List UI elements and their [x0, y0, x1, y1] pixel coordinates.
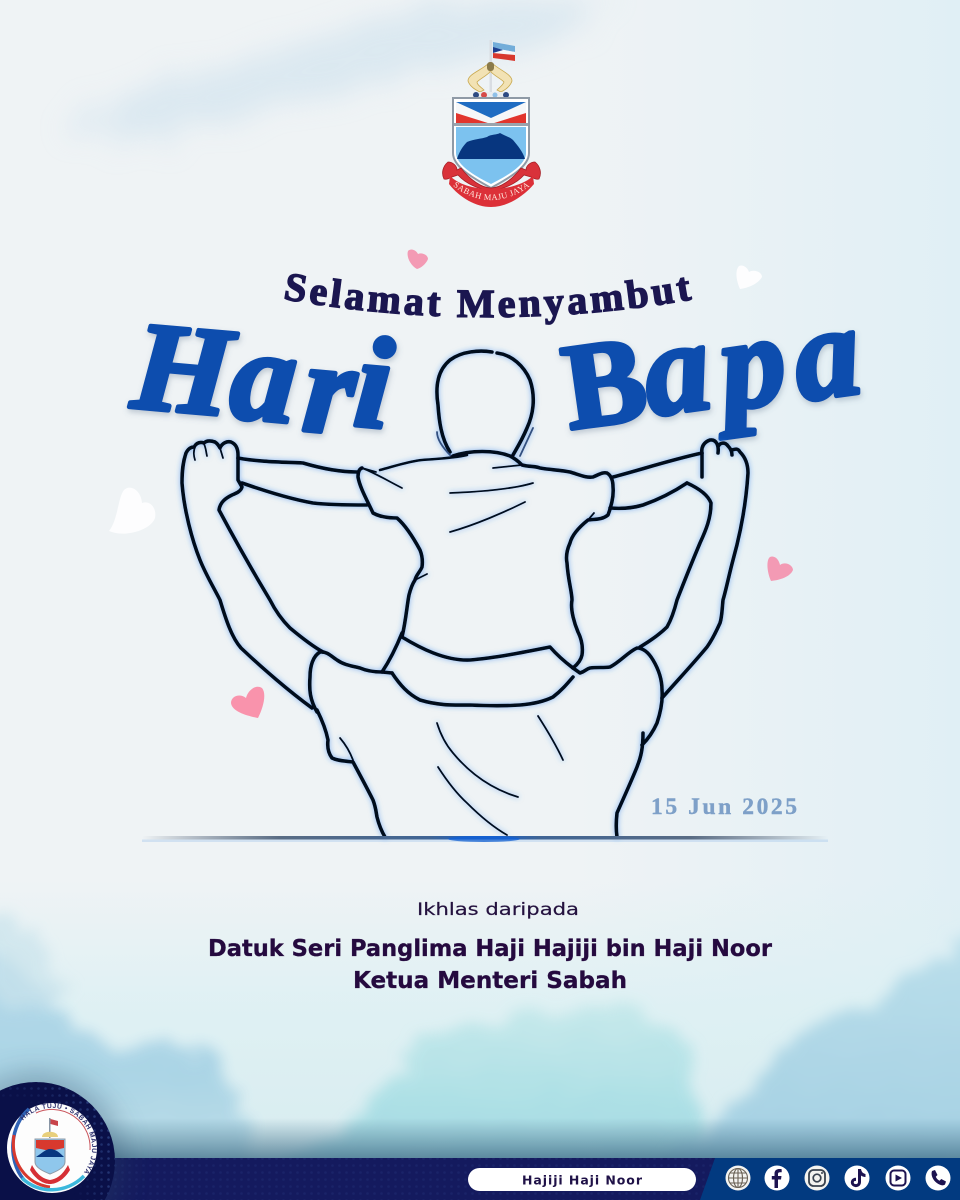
father right hand and arm — [640, 440, 748, 698]
text: Ikhlas daripada: Ikhlas daripada — [417, 900, 579, 920]
heading: Bapa: B — [555, 311, 654, 456]
footer name pill: Hajiji Haji Noor — [522, 1172, 643, 1188]
illustration: father carrying child on shoulders — [182, 351, 748, 837]
heart: right pink — [767, 557, 793, 581]
child head — [437, 351, 533, 455]
heading: Selamat Menyambut: Selamat Menyambut — [284, 274, 692, 325]
motto text: SABAH MAJU JAYA — [454, 182, 530, 200]
icon: instagram — [804, 1166, 830, 1190]
heading: Bapa: apa — [634, 278, 868, 445]
badge mini crest — [30, 1118, 70, 1184]
crest flag — [490, 40, 515, 95]
child neckline left — [380, 455, 467, 470]
father left knuckle ticks — [194, 444, 223, 460]
icon: facebook — [764, 1166, 790, 1190]
icon: video play — [886, 1166, 910, 1190]
ground line — [142, 836, 828, 842]
child shirt — [358, 452, 613, 668]
crest arms — [468, 62, 512, 92]
crest ribbon motto — [442, 162, 541, 207]
icon: phone — [926, 1166, 950, 1190]
crest shield — [453, 98, 529, 188]
heart: top white — [736, 265, 762, 289]
footer bar — [0, 1158, 960, 1200]
heart: top pink — [408, 250, 428, 269]
crest: Sabah coat of arms — [442, 40, 541, 207]
father shirt folds — [437, 716, 563, 835]
icon: tiktok — [844, 1166, 870, 1190]
heart: left white — [109, 488, 155, 534]
badge swooshes — [13, 1109, 90, 1190]
date: 15 Jun 2025 — [651, 794, 797, 820]
heart: lower pink — [231, 687, 264, 718]
child left arm — [238, 458, 367, 505]
badge ring text: HALA TUJU • SABAH MAJU JAYA — [20, 1103, 97, 1174]
heading: Hari: ari — [225, 302, 398, 463]
father left hand and arm — [182, 441, 323, 708]
child ears — [437, 428, 533, 456]
icon: globe — [726, 1166, 750, 1190]
child shirt folds — [415, 465, 594, 580]
footer name pill — [468, 1168, 696, 1191]
heading: Hari: H — [127, 296, 241, 444]
text: sender title: Ketua Menteri Sabah — [353, 968, 627, 994]
crest wreath — [472, 92, 509, 98]
father shoulders and back — [310, 652, 392, 837]
text: sender name: Datuk Seri Panglima Haji Hajiji bin Haji Noor — [208, 936, 773, 962]
child sleeve fold left — [362, 468, 402, 488]
child right arm — [610, 453, 702, 508]
badge: Hala Tuju Sabah Maju Jaya — [0, 1062, 132, 1200]
